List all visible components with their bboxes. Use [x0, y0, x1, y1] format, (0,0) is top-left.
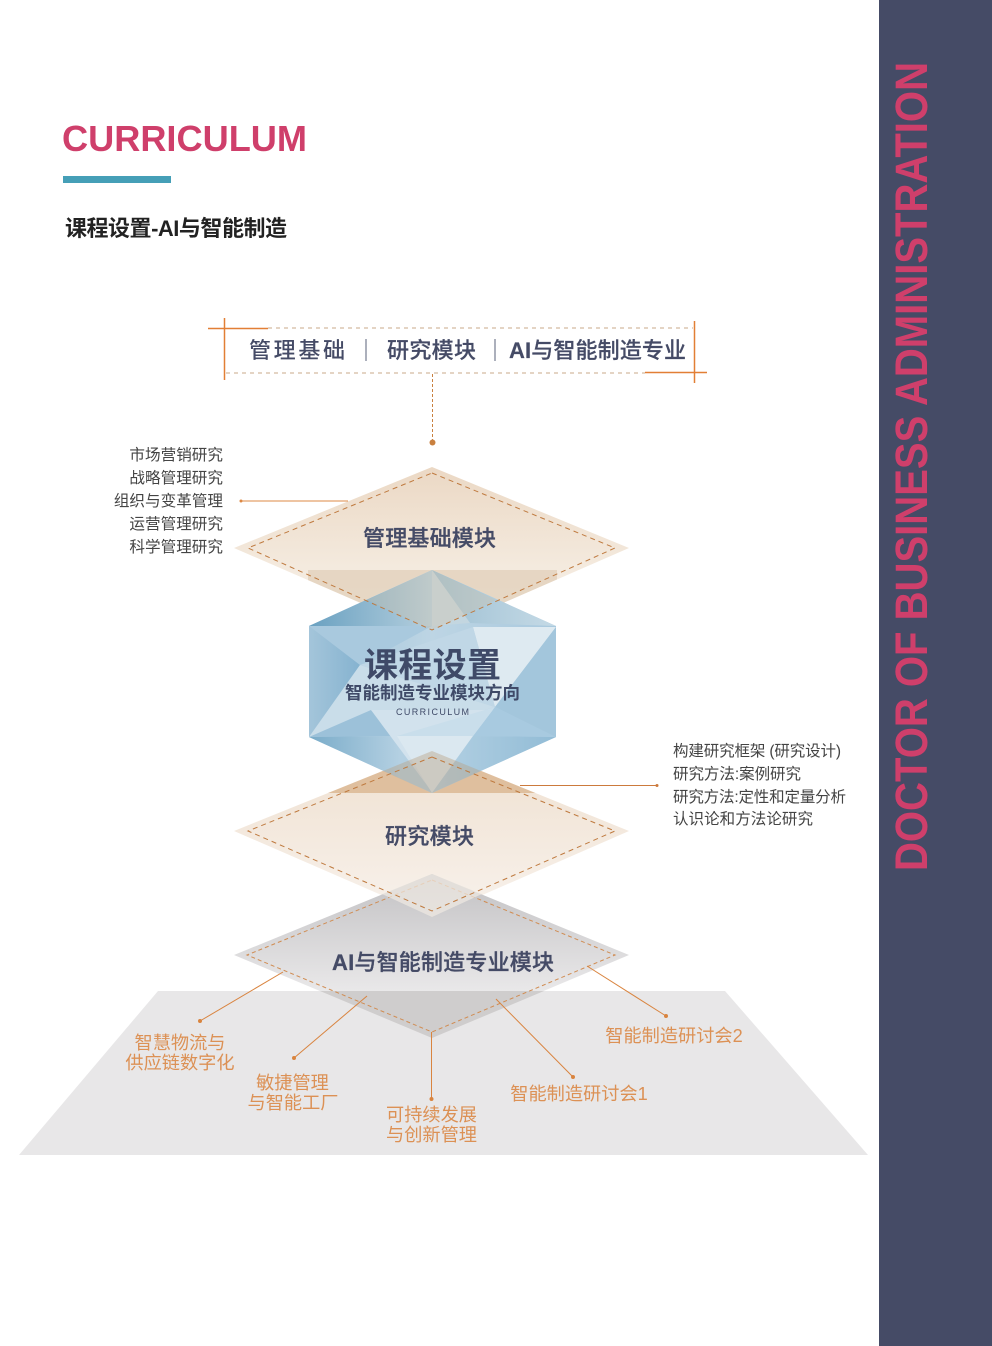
left list: management courses: 战略管理研究	[129, 469, 223, 487]
topic labels: AI module: 智能制造研讨会2	[605, 1026, 743, 1046]
overlap tint: research diamond over AI diamond	[382, 874, 482, 917]
module label: management foundations: 管理基础模块	[363, 526, 496, 551]
diamond: management foundations	[234, 467, 628, 602]
subtitle: 课程设置-AI与智能制造	[65, 216, 287, 241]
header frame: module list	[208, 318, 707, 383]
right connector	[520, 784, 658, 787]
right list: research courses: 构建研究框架 (研究设计)	[673, 742, 841, 760]
module label: AI: AI与智能制造专业模块	[332, 950, 554, 975]
diamond: AI module	[234, 874, 629, 1038]
dashed outline: management foundations	[248, 473, 615, 630]
topic labels: AI module: 与创新管理	[386, 1125, 477, 1145]
topic labels: AI module: 与智能工厂	[248, 1093, 338, 1113]
sidebar	[879, 0, 992, 1346]
title: CURRICULUM	[62, 118, 307, 159]
diamond: research module base	[234, 770, 628, 895]
hexagon: curriculum core	[309, 570, 556, 793]
left list: management courses: 组织与变革管理	[114, 492, 223, 510]
left connector	[240, 500, 348, 502]
header frame: module list: 管理基础	[249, 338, 345, 363]
topic labels: AI module: 敏捷管理	[256, 1073, 329, 1093]
trapezoid base	[19, 991, 868, 1155]
topic labels: AI module: 供应链数字化	[125, 1053, 235, 1073]
connector: frame to diamond	[430, 374, 436, 446]
connectors: AI module to topics	[198, 966, 668, 1100]
module label: research: 研究模块	[385, 824, 474, 849]
topic labels: AI module: 可持续发展	[386, 1105, 477, 1125]
header frame: module list: AI与智能制造专业	[509, 338, 686, 363]
left list: management courses: 科学管理研究	[129, 538, 223, 556]
hexagon title: 课程设置	[364, 647, 501, 685]
left list: management courses	[114, 446, 223, 556]
left list: management courses: 市场营销研究	[129, 446, 223, 464]
right list: research courses	[673, 742, 846, 828]
hexagon title	[345, 647, 520, 717]
topic labels: AI module	[125, 1026, 743, 1145]
topic labels: AI module: 智能制造研讨会1	[510, 1084, 648, 1104]
right list: research courses: 研究方法:定性和定量分析	[673, 788, 846, 806]
hexagon title: 智能制造专业模块方向	[345, 683, 520, 703]
right list: research courses: 研究方法:案例研究	[673, 765, 801, 783]
title accent bar	[63, 176, 171, 183]
header frame: module list: 研究模块	[387, 338, 476, 363]
left list: management courses: 运营管理研究	[129, 515, 223, 533]
topic labels: AI module: 智慧物流与	[135, 1033, 225, 1053]
overlap tint: research diamond over hexagon	[383, 751, 481, 793]
hexagon title: CURRICULUM	[396, 707, 469, 717]
overlap tint: management diamond over hexagon	[367, 570, 496, 630]
right list: research courses: 认识论和方法论研究	[673, 810, 813, 828]
dashed outline: research module	[248, 757, 615, 911]
